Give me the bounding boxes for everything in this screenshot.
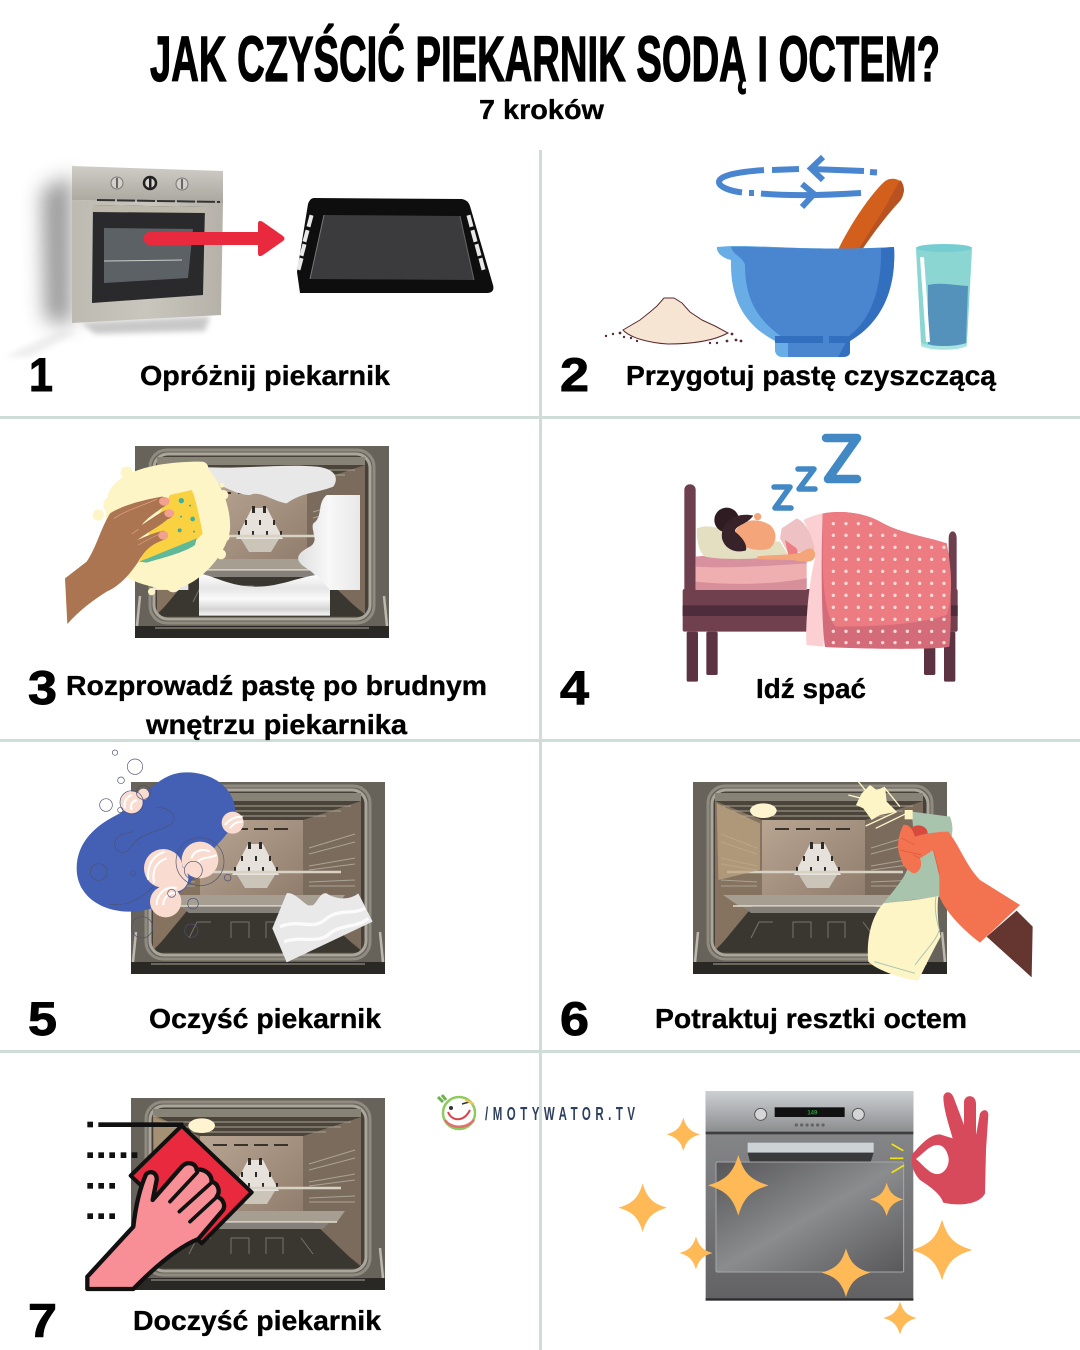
icon: stirring arrows [719, 157, 877, 207]
panel: clean oven result [618, 1091, 988, 1335]
step number 5: 5 [28, 992, 57, 1045]
panel: step 2 prepare paste [560, 157, 996, 401]
panel: step 3 spread paste [28, 446, 487, 740]
panel: step 7 finish cleaning [28, 1098, 385, 1347]
subtitle: 7 kroków [479, 94, 604, 125]
icon: spoon [838, 179, 904, 250]
image: built-in oven: 149 [807, 1110, 818, 1116]
caption 2: Przygotuj pastę czyszczącą [626, 360, 996, 391]
step number 3: 3 [28, 661, 57, 714]
icon: sleeping person in bed [683, 484, 958, 682]
icon: smiling face [438, 1095, 475, 1129]
panel: step 6 treat with vinegar [560, 782, 1033, 1045]
step number 2: 2 [560, 348, 589, 401]
step number 7: 7 [28, 1294, 57, 1347]
icon: baking soda pile [605, 298, 742, 344]
image: oven interior [135, 446, 389, 638]
logo: motywator.tv [438, 1095, 636, 1129]
caption 3: wnętrzu piekarnika [145, 709, 407, 740]
step number 6: 6 [560, 992, 589, 1045]
illustration: blue cleaning blob with bubbles [77, 750, 373, 962]
arrow: red arrow to tray [144, 221, 284, 256]
panel: step 1 empty the oven [5, 166, 493, 401]
brand name: /MOTYWATOR.TV [485, 1104, 636, 1125]
icon: wall oven [5, 166, 223, 357]
caption 7: Doczyść piekarnik [133, 1305, 381, 1336]
caption 3: Rozprowadź pastę po brudnym [66, 670, 487, 701]
step number 4: 4 [560, 661, 589, 714]
icon: baking tray [297, 198, 493, 293]
caption 3 [66, 670, 487, 740]
caption 6: Potraktuj resztki octem [655, 1003, 967, 1034]
panel: step 5 clean the oven [28, 750, 385, 1045]
image: oven interior [131, 782, 385, 974]
step number 1: 1 [29, 348, 53, 401]
illustration: paste, hand and sponge [65, 462, 360, 624]
caption 4: Idź spać [756, 673, 866, 704]
icon: zzz [774, 438, 857, 508]
image: oven interior [131, 1098, 385, 1290]
icon: OK hand [890, 1092, 988, 1204]
caption 1: Opróżnij piekarnik [140, 360, 390, 391]
image: built-in oven [706, 1091, 913, 1301]
icons: sparkles [618, 1118, 972, 1335]
image: oven interior [693, 782, 947, 974]
caption 5: Oczyść piekarnik [149, 1003, 381, 1034]
illustration: hand with spray bottle [717, 782, 1033, 981]
icon: glass of water [916, 244, 972, 350]
icon: mixing bowl [717, 246, 894, 357]
illustration: hand wiping with red cloth [87, 1115, 252, 1289]
panel: step 4 go to sleep [560, 438, 958, 714]
